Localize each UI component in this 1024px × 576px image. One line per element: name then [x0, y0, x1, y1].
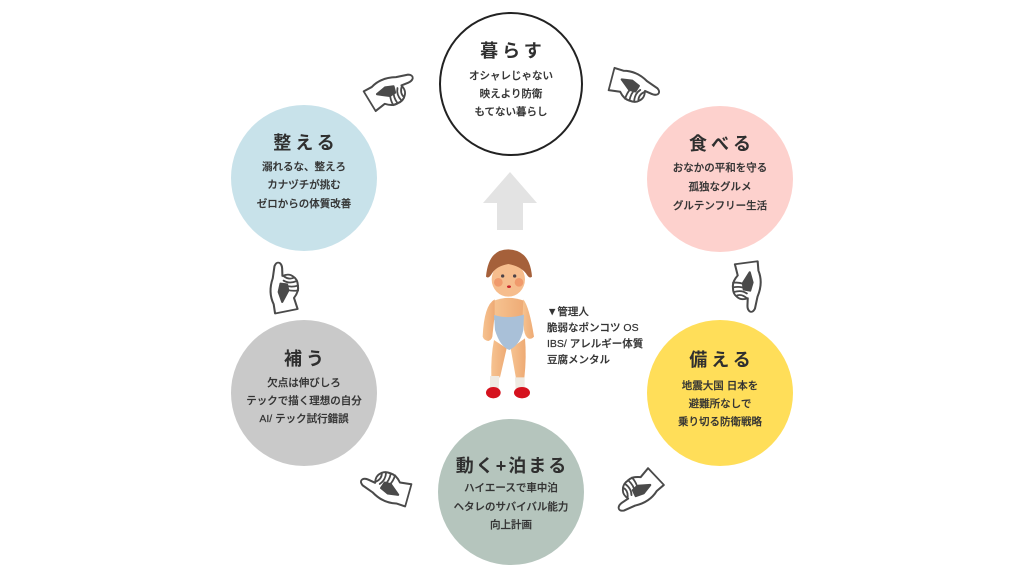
text: 補う description: AI/ テック試行錯誤: [259, 413, 349, 425]
diaper: [494, 315, 524, 350]
panel: 食べる: [647, 106, 793, 252]
icon: hand pointer left: [270, 262, 299, 314]
panel: 整える: [231, 105, 377, 251]
text: 暮らす description: 映えより防衛: [480, 88, 542, 100]
text: 整える description: 溺れるな、整えろ: [262, 160, 346, 172]
text: 備える description: 地震大国 日本を: [682, 380, 758, 392]
heading: 備える: 備える: [689, 350, 755, 370]
torso: [493, 298, 525, 320]
panel: 備える: [647, 320, 793, 466]
heading: 暮らす: 暮らす: [480, 41, 546, 61]
text: 食べる description: 孤独なグルメ: [688, 180, 752, 192]
text: 動く+泊まる description: 向上計画: [490, 519, 532, 531]
panel: 動く+泊まる: [438, 419, 584, 565]
text: 整える description: ゼロからの体質改善: [257, 198, 351, 210]
text: 管理人 profile: IBS/ アレルギー体質: [547, 338, 643, 350]
icon: hand pointer bottom left: [358, 463, 415, 510]
icon: hand pointer top right: [605, 64, 662, 110]
panel: 暮らす: [439, 12, 583, 156]
panel: 補う: [231, 320, 377, 466]
heading: 補う: 補う: [284, 349, 328, 369]
text: 暮らす description: オシャレじゃない: [469, 70, 553, 82]
heading: 整える: 整える: [273, 133, 339, 153]
heading: 食べる: 食べる: [689, 134, 755, 154]
heading: 動く+泊まる: 動く+泊まる: [456, 456, 568, 476]
hair: [486, 249, 532, 277]
text: 動く+泊まる description: ヘタレのサバイバル能力: [454, 500, 568, 512]
text: 暮らす description: もてない暮らし: [474, 106, 548, 118]
text: 備える description: 乗り切る防衛戦略: [678, 416, 762, 428]
text: 補う description: [246, 376, 362, 425]
legs: [491, 340, 507, 377]
text: 動く+泊まる description: ハイエースで車中泊: [464, 482, 558, 494]
text: 食べる description: [673, 162, 767, 212]
text: 備える description: [678, 380, 762, 428]
text: 管理人 profile: 脆弱なポンコツ OS: [547, 322, 639, 334]
text: 備える description: 避難所なしで: [689, 398, 751, 410]
text: 整える description: [257, 160, 351, 210]
text: 動く+泊まる description: [454, 482, 568, 531]
cheeks, eyes and mouth: [494, 278, 503, 287]
icon: hand pointer bottom right: [608, 465, 666, 516]
text: 暮らす description: [469, 70, 553, 118]
text: 補う description: テックで描く理想の自分: [246, 395, 362, 407]
text: 食べる description: おなかの平和を守る: [673, 162, 767, 174]
socks: [490, 376, 499, 389]
text: 管理人 profile: 豆腐メンタル: [547, 354, 610, 366]
face: [492, 262, 525, 297]
arms: [483, 299, 495, 341]
text: 管理人 profile: ▼管理人: [547, 306, 589, 318]
icon: hand pointer right: [732, 260, 761, 312]
shoes: [486, 387, 501, 398]
doll photo: [483, 249, 534, 398]
arrow: centre up arrow: [483, 172, 537, 230]
text: 管理人 profile: [547, 306, 643, 366]
text: 食べる description: グルテンフリー生活: [673, 200, 767, 212]
icon: hand pointer top left: [362, 69, 420, 114]
text: 補う description: 欠点は伸びしろ: [267, 377, 341, 389]
text: 整える description: カナヅチが挑む: [267, 179, 341, 191]
